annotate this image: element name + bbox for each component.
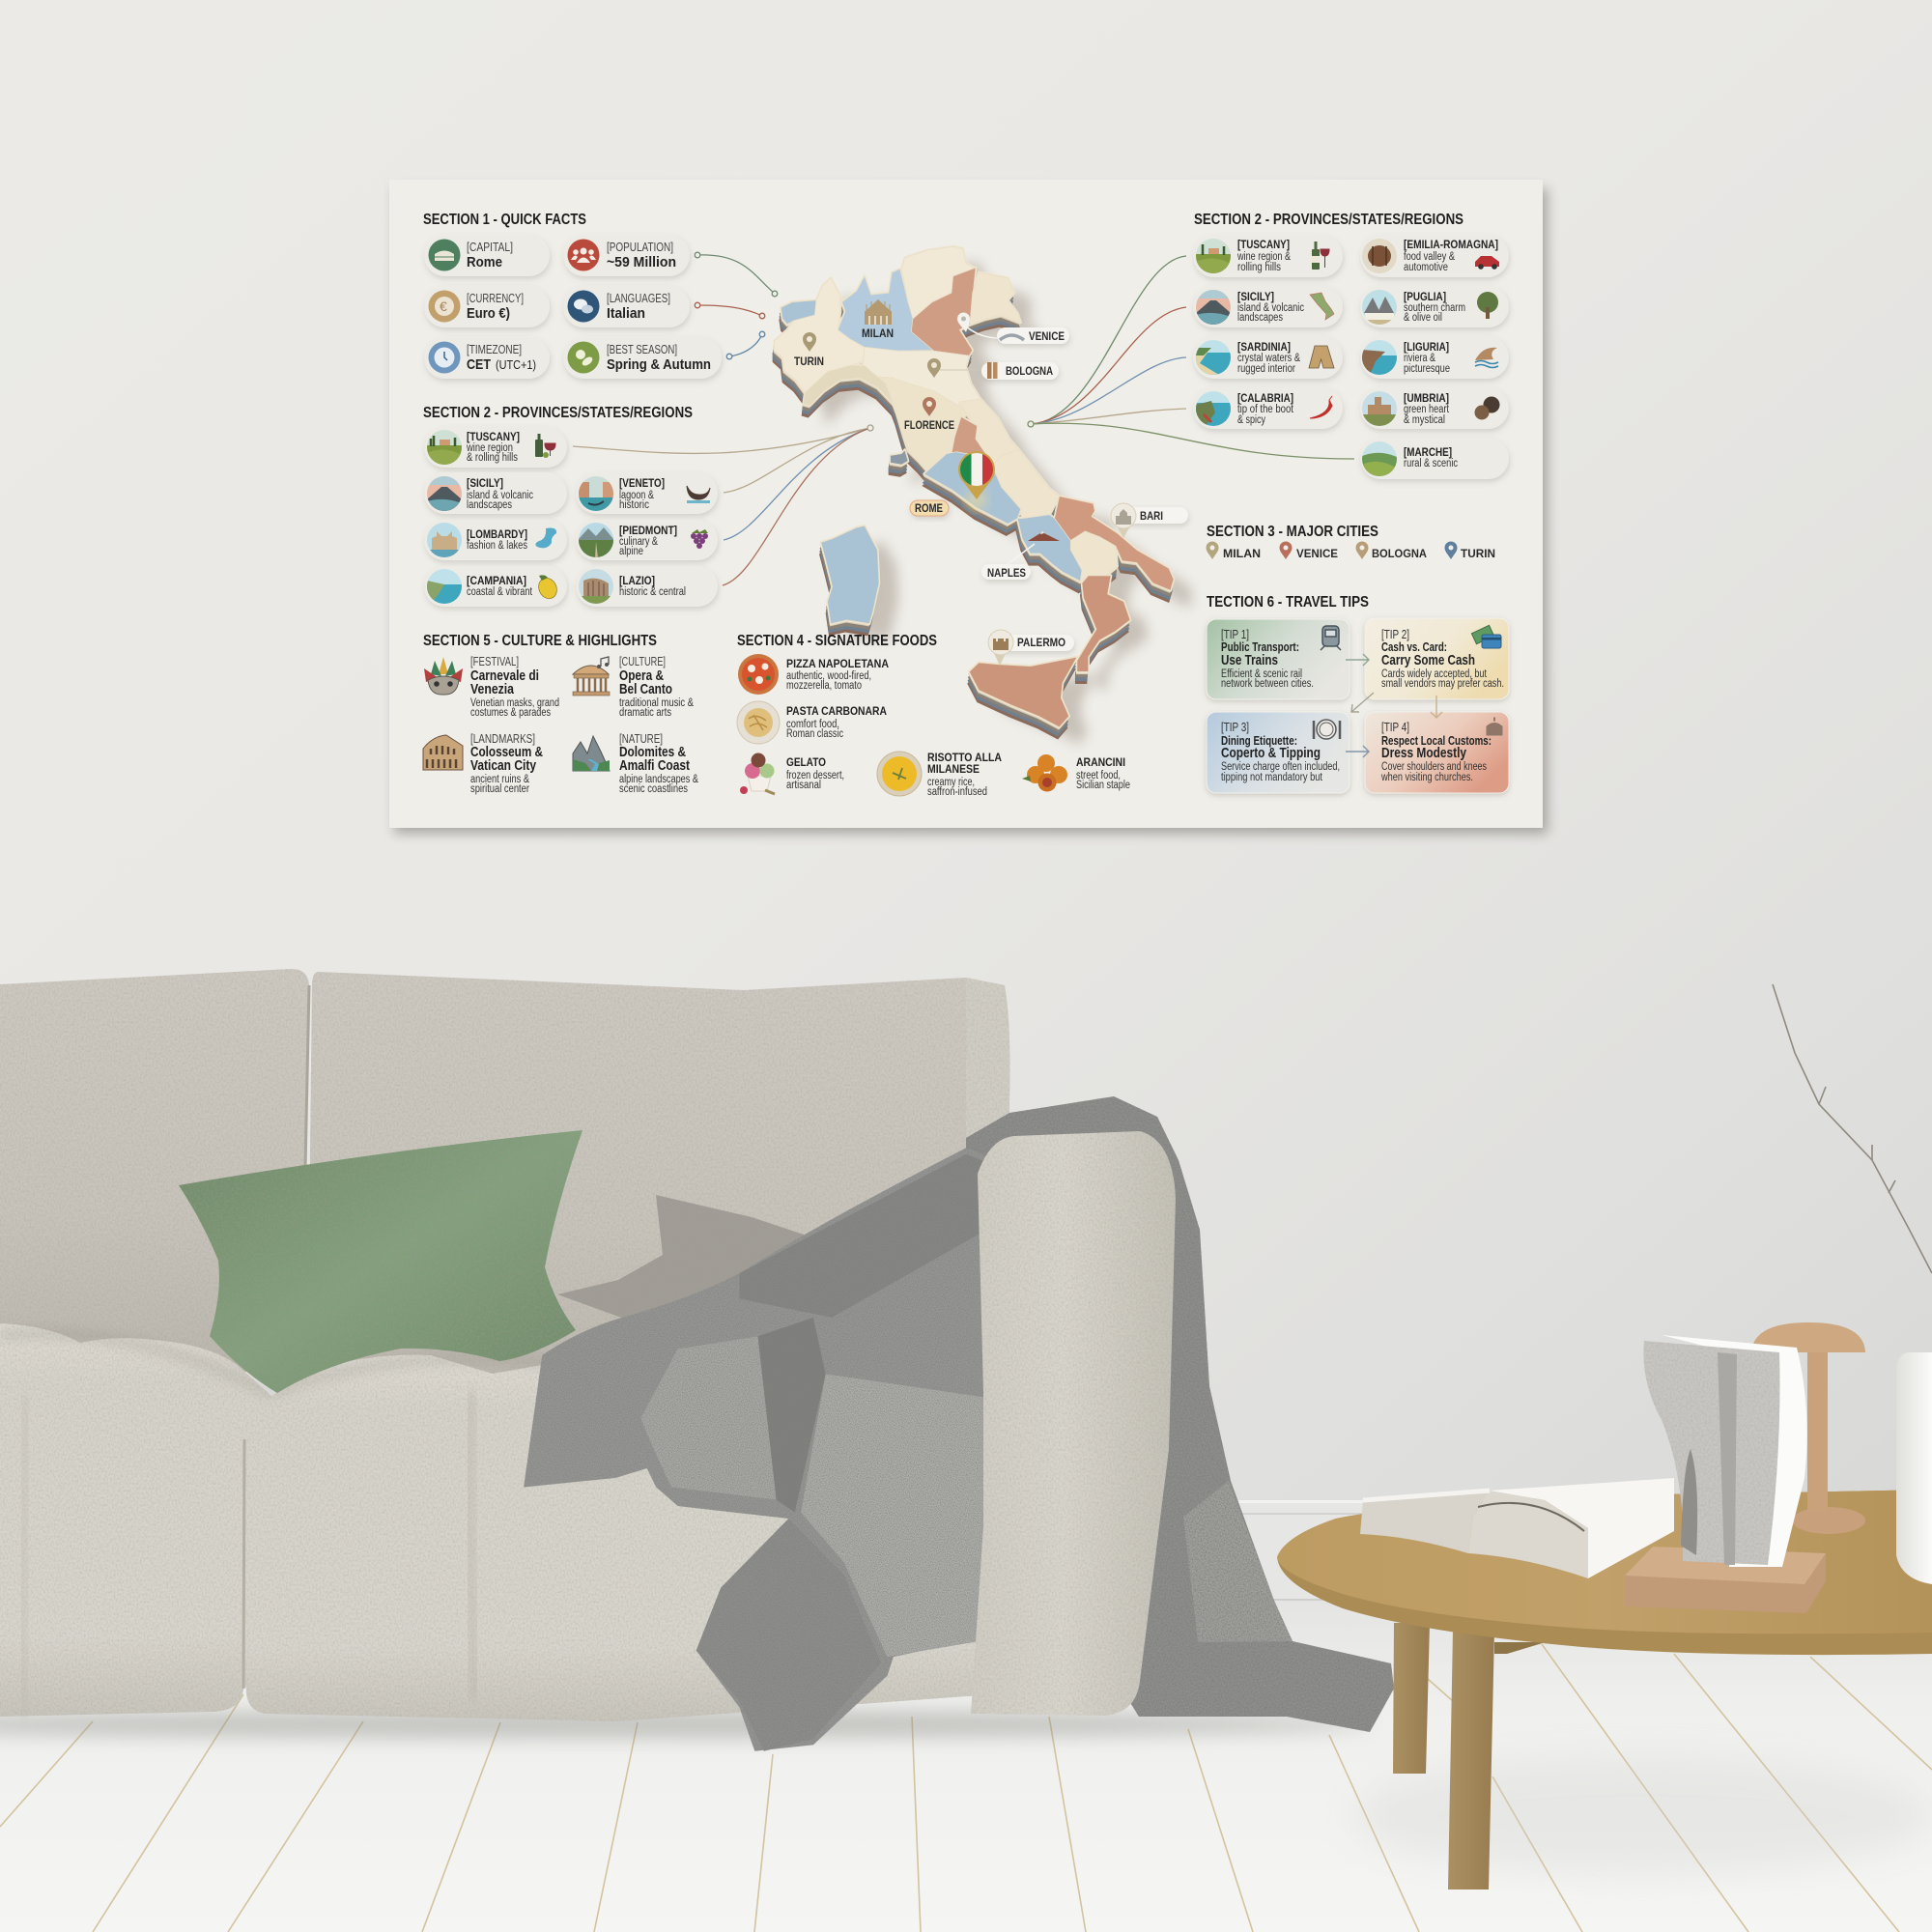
branch in vase: [1773, 984, 1932, 1273]
food: gelato: frozen dessert,: [786, 770, 844, 781]
fact: capital: [CAPITAL]: [467, 241, 513, 254]
heading: section 3: SECTION 3 - MAJOR CITIES: [1207, 524, 1378, 540]
item: opera: Opera &: [619, 668, 664, 684]
callout: Bologna: [940, 362, 1059, 380]
region: Calabria right: tip of the boot: [1237, 404, 1294, 415]
arrow: tip 2 to tip 4: [1431, 696, 1442, 718]
region: Campania: [424, 566, 567, 607]
fact: capital: Rome: [467, 254, 502, 270]
region: Veneto: [576, 472, 718, 514]
callout: Palermo: [988, 630, 1074, 666]
callout: Palermo: PALERMO: [1017, 636, 1065, 649]
region: Sicily: island & volcanic: [467, 490, 533, 501]
item: carnevale: [FESTIVAL]: [470, 655, 519, 668]
item: nature: scenic coastlines: [619, 783, 688, 795]
callout: Naples: NAPLES: [987, 566, 1026, 580]
map labels: [794, 327, 954, 432]
item: nature: Amalfi Coast: [619, 758, 690, 774]
region: Tuscany right: [1193, 235, 1343, 277]
item: carnevale: Carnevale di: [470, 668, 539, 684]
callout: Bari: [1111, 503, 1188, 538]
region: Liguria: picturesque: [1404, 363, 1450, 375]
food: arancini: Sicilian staple: [1076, 780, 1130, 791]
region: Puglia: [1360, 286, 1509, 327]
icon: nuraghe: [1309, 346, 1334, 368]
item: carnevale: [424, 655, 559, 719]
icon: wave: [1475, 348, 1498, 367]
wooden plank floor: [0, 1601, 1932, 1932]
region: Piedmont: [576, 520, 718, 560]
pin: Florence: [923, 397, 936, 416]
sofa: [0, 969, 1009, 1721]
fact: population: [POPULATION]: [607, 241, 673, 254]
region: Tuscany: & rolling hills: [467, 452, 518, 464]
food: risotto: RISOTTO ALLA: [927, 751, 1002, 764]
tip 1 card: network between cities.: [1221, 678, 1314, 690]
item: carnevale: costumes & parades: [470, 707, 551, 719]
region: Sardinia right: [1193, 336, 1343, 379]
item: landmarks: [423, 732, 543, 795]
item: opera: [573, 655, 694, 719]
region: Emilia-Romagna: [EMILIA-ROMAGNA]: [1404, 238, 1498, 251]
heading: section 1: SECTION 1 - QUICK FACTS: [423, 212, 586, 228]
region: Sardinia right: crystal waters &: [1237, 353, 1300, 364]
region: Lazio: historic & central: [619, 586, 686, 598]
arrow: tip 3 to tip 4: [1346, 746, 1369, 757]
tip 2 card: Carry Some Cash: [1381, 652, 1475, 668]
icon: opera house: [573, 657, 610, 696]
legend: Venice: [1279, 541, 1338, 560]
fact: currency: Euro €): [467, 305, 510, 322]
table legs: [1393, 1623, 1546, 1889]
legend: Turin: [1445, 541, 1495, 560]
pin: Venice: [957, 313, 970, 332]
item: opera: dramatic arts: [619, 707, 671, 719]
legend: Turin: TURIN: [1461, 547, 1495, 560]
map labels: MILAN: [862, 327, 894, 340]
callout: Bologna: BOLOGNA: [1006, 364, 1053, 378]
panel: section 6 travel tips: [1207, 594, 1509, 793]
region: Lazio: [576, 566, 718, 607]
panel: section 2 regions (left): [423, 405, 718, 607]
region: Piedmont: alpine: [619, 546, 643, 557]
item: nature: Dolomites &: [619, 745, 686, 760]
item: opera: Bel Canto: [619, 682, 672, 697]
tip 2 card: [1365, 618, 1509, 699]
tip 3 card: Coperto & Tipping: [1221, 745, 1321, 761]
legend: Milan: [1206, 541, 1261, 560]
region: Veneto: lagoon &: [619, 490, 654, 501]
connector lines: [573, 252, 1354, 585]
fact: currency: €: [440, 298, 447, 314]
item: nature: alpine landscapes &: [619, 774, 698, 785]
item: nature: [573, 732, 698, 795]
map of Italy with 3D regions: [773, 246, 1193, 744]
region: Puglia: southern charm: [1404, 302, 1465, 314]
icon: plate and cutlery: [1314, 720, 1340, 739]
fact: timezone: CET: [467, 356, 491, 373]
food: pizza: authentic, wood-fired,: [786, 670, 871, 682]
item: carnevale: Venezia: [470, 682, 515, 697]
region: Lombardy: [LOMBARDY]: [467, 527, 527, 541]
icon: mountains: [573, 736, 610, 771]
region: Sicily right: landscapes: [1237, 312, 1283, 324]
icon: carnival mask: [424, 657, 463, 695]
food: pasta: comfort food,: [786, 719, 839, 730]
pin: Bologna: [927, 358, 941, 378]
sofa back cushions: [0, 969, 1009, 1401]
fact: capital: [424, 235, 550, 276]
arrow: tip 1 to tip 2: [1346, 654, 1369, 666]
fact: currency: [CURRENCY]: [467, 292, 524, 305]
region: Umbria: & mystical: [1404, 414, 1445, 426]
heading: section 2 right: SECTION 2 - PROVINCES/STATES/REGIONS: [1194, 212, 1463, 228]
region: Tuscany: wine region: [466, 442, 513, 454]
icon: gondola: [687, 486, 710, 503]
food: pasta: PASTA CARBONARA: [786, 704, 887, 718]
tip 1 card: Public Transport:: [1221, 640, 1299, 654]
icon: chili: [1310, 396, 1332, 418]
food: pizza: [738, 654, 889, 695]
callout: Rome: ROME: [915, 501, 943, 515]
region: Piedmont: [PIEDMONT]: [619, 524, 677, 537]
callout: Venice: [966, 327, 1069, 344]
legend: Venice: VENICE: [1296, 547, 1338, 560]
tip 1 card: [1207, 619, 1350, 699]
sofa armrest front: [971, 1131, 1176, 1716]
callout: Venice: VENICE: [1029, 329, 1065, 343]
region: Veneto: historic: [619, 499, 649, 511]
food: gelato: GELATO: [786, 755, 826, 769]
heading: section 6: TECTION 6 - TRAVEL TIPS: [1207, 594, 1369, 611]
region: Campania: [CAMPANIA]: [467, 574, 526, 587]
icon: wine bottle and glass: [535, 434, 555, 458]
region: Marche: [MARCHE]: [1404, 445, 1452, 459]
region: Sardinia right: [SARDINIA]: [1237, 340, 1291, 354]
region: Marche: rural & scenic: [1404, 458, 1458, 469]
region: Marche: [1360, 438, 1509, 479]
panel: section 1 quick facts: [423, 212, 722, 379]
heading: section 4: SECTION 4 - SIGNATURE FOODS: [737, 633, 937, 649]
tip 4 card: when visiting churches.: [1380, 772, 1473, 783]
fact: currency: [424, 286, 550, 327]
region: Tuscany: [TUSCANY]: [467, 430, 520, 443]
icon: olive tree: [1477, 292, 1498, 319]
region: Sicily: [SICILY]: [467, 476, 503, 490]
region: Lombardy: [424, 520, 567, 560]
tip 1 card: Efficient & scenic rail: [1221, 668, 1302, 680]
tip 2 card: [TIP 2]: [1381, 628, 1409, 641]
sofa armrest back end: [966, 978, 1009, 1159]
coffee table: [1277, 1490, 1932, 1889]
heading: section 2 left: SECTION 2 - PROVINCES/STATES/REGIONS: [423, 405, 693, 421]
region: Puglia: & olive oil: [1404, 312, 1442, 324]
panel: section 3 major cities: [1206, 524, 1495, 560]
region: Piedmont: culinary &: [619, 536, 658, 548]
fact: best season: [BEST SEASON]: [607, 343, 677, 356]
panel: section 4 signature foods: [737, 633, 1130, 798]
region: Tuscany right: rolling hills: [1237, 262, 1281, 273]
map labels: FLORENCE: [904, 418, 954, 432]
icon: church: [1487, 718, 1502, 735]
region: Umbria: [UMBRIA]: [1404, 391, 1449, 405]
legend: Bologna: [1356, 541, 1427, 560]
fact: languages: Italian: [607, 305, 645, 322]
item: landmarks: spiritual center: [470, 783, 529, 795]
region: Lazio: [LAZIO]: [619, 574, 655, 587]
spool ornament: [1751, 1322, 1865, 1534]
icon: truffles: [1474, 396, 1499, 419]
food: arancini: [1022, 754, 1130, 792]
tip 1 card: [TIP 1]: [1221, 628, 1249, 641]
region: Umbria: [1360, 387, 1509, 429]
icon: Italy silhouette: [1310, 293, 1334, 320]
tip 1 card: Use Trains: [1221, 652, 1278, 668]
panel: infographic canvas on wall: [389, 180, 1548, 834]
table top: [1277, 1490, 1932, 1655]
region: Sicily: [424, 472, 567, 514]
icon: train: [1321, 626, 1341, 650]
region: Liguria: [1360, 336, 1509, 379]
pin: Turin: [803, 332, 816, 352]
heading: section 5: SECTION 5 - CULTURE & HIGHLIGHTS: [423, 633, 657, 649]
region: Sicily right: [SICILY]: [1237, 290, 1274, 303]
tip 4 card: Cover shoulders and knees: [1381, 761, 1487, 773]
legend: Milan: MILAN: [1223, 547, 1261, 560]
food: risotto: creamy rice,: [927, 777, 975, 788]
icon: grapes: [691, 529, 708, 549]
sofa seat cushions: [0, 1323, 995, 1721]
tip 2 card: small vendors may prefer cash.: [1381, 678, 1504, 690]
small grey pillow: [557, 1195, 807, 1323]
plaster sculpture: [1643, 1335, 1807, 1567]
item: landmarks: ancient ruins &: [470, 774, 529, 785]
panel: section 5 culture and highlights: [423, 633, 698, 795]
grey throw blanket (back drape): [966, 1096, 1394, 1732]
region: Sicily right: island & volcanic: [1237, 302, 1304, 314]
fact: population: [563, 235, 690, 276]
tip 2 card: Cash vs. Card:: [1381, 640, 1447, 654]
tip 4 card: [1365, 712, 1509, 793]
region: Puglia: [PUGLIA]: [1404, 290, 1446, 303]
fact: best season: [563, 337, 722, 379]
tip 2 card: Cards widely accepted, but: [1381, 668, 1488, 680]
map labels: TURIN: [794, 355, 824, 368]
item: opera: traditional music &: [619, 697, 694, 709]
callout: Bari: BARI: [1140, 509, 1163, 523]
region: Tuscany right: [TUSCANY]: [1237, 238, 1290, 251]
tip 3 card: [TIP 3]: [1221, 721, 1249, 734]
tip 4 card: Dress Modestly: [1381, 745, 1467, 761]
region: Veneto: [VENETO]: [619, 476, 665, 490]
food: pasta: Roman classic: [786, 728, 843, 740]
region: Tuscany right: wine region &: [1236, 251, 1291, 263]
region: Calabria right: & spicy: [1237, 414, 1265, 426]
callout: Naples: [981, 544, 1035, 580]
panel: section 2 regions (right): [1193, 212, 1509, 479]
item: opera: [CULTURE]: [619, 655, 666, 668]
tip 3 card: tipping not mandatory but: [1221, 772, 1323, 783]
item: landmarks: Vatican City: [470, 758, 536, 774]
wooden base: [1625, 1547, 1826, 1613]
region: Lombardy: fashion & lakes: [467, 540, 527, 552]
tip 3 card: Dining Etiquette:: [1221, 734, 1297, 748]
food: gelato: [740, 753, 844, 794]
green pillow: [179, 1130, 582, 1393]
icon: red car: [1475, 256, 1499, 270]
item: nature: [NATURE]: [619, 732, 663, 746]
legend: Bologna: BOLOGNA: [1372, 547, 1427, 560]
grey throw blanket (front): [524, 1148, 998, 1751]
icon: lake: [535, 528, 556, 548]
food: gelato: artisanal: [786, 780, 821, 791]
food: pizza: mozzerella, tomato: [786, 680, 862, 692]
region: Calabria right: [CALABRIA]: [1237, 391, 1293, 405]
white vase: [1896, 1352, 1932, 1584]
fact: languages: [563, 286, 690, 327]
icon: Italian flag pin: [958, 451, 995, 509]
food: risotto: [877, 751, 1002, 798]
icon: colosseum: [423, 735, 463, 770]
icon: Milan cathedral: [865, 299, 892, 325]
region: Tuscany: [424, 427, 567, 468]
region: Sicily: landscapes: [467, 499, 512, 511]
icon: wine: [1312, 242, 1329, 270]
food: risotto: saffron-infused: [927, 786, 987, 798]
food: arancini: street food,: [1076, 770, 1121, 781]
fact: best season: Spring & Autumn: [607, 356, 711, 373]
fact: languages: [LANGUAGES]: [607, 292, 670, 305]
icon: Naples volcano: [1028, 530, 1060, 541]
food: arancini: ARANCINI: [1076, 755, 1125, 769]
region: Sardinia right: rugged interior: [1237, 363, 1295, 375]
item: carnevale: Venetian masks, grand: [470, 697, 559, 709]
food: risotto: MILANESE: [927, 762, 980, 776]
fact: timezone: [424, 337, 550, 379]
fact: timezone: (UTC+1): [496, 358, 536, 372]
item: landmarks: [LANDMARKS]: [470, 732, 535, 746]
tip 3 card: Service charge often included,: [1221, 761, 1340, 773]
icon: cash and card: [1471, 625, 1501, 648]
tip 4 card: [TIP 4]: [1381, 721, 1409, 734]
icon: lemon: [535, 575, 560, 602]
fact: population: ~59 Million: [607, 254, 676, 270]
food: pasta: [737, 701, 887, 744]
tip 4 card: Respect Local Customs:: [1381, 734, 1492, 748]
region: Campania: coastal & vibrant: [467, 586, 533, 598]
region: Umbria: green heart: [1404, 404, 1450, 415]
open book: [1360, 1478, 1674, 1578]
tip 3 card: [1207, 712, 1350, 793]
item: landmarks: Colosseum &: [470, 745, 543, 760]
region: Emilia-Romagna: [1360, 235, 1509, 277]
region: Sicily right: [1193, 286, 1343, 327]
region: Liguria: [LIGURIA]: [1404, 340, 1449, 354]
region: Emilia-Romagna: automotive: [1404, 262, 1448, 273]
arrow: tip 2 to tip 3: [1351, 693, 1374, 712]
region: Calabria right: [1193, 387, 1343, 429]
region: Liguria: riviera &: [1404, 353, 1435, 364]
region: Emilia-Romagna: food valley &: [1404, 251, 1455, 263]
fact: timezone: [TIMEZONE]: [467, 343, 522, 356]
food: pizza: PIZZA NAPOLETANA: [786, 657, 889, 670]
